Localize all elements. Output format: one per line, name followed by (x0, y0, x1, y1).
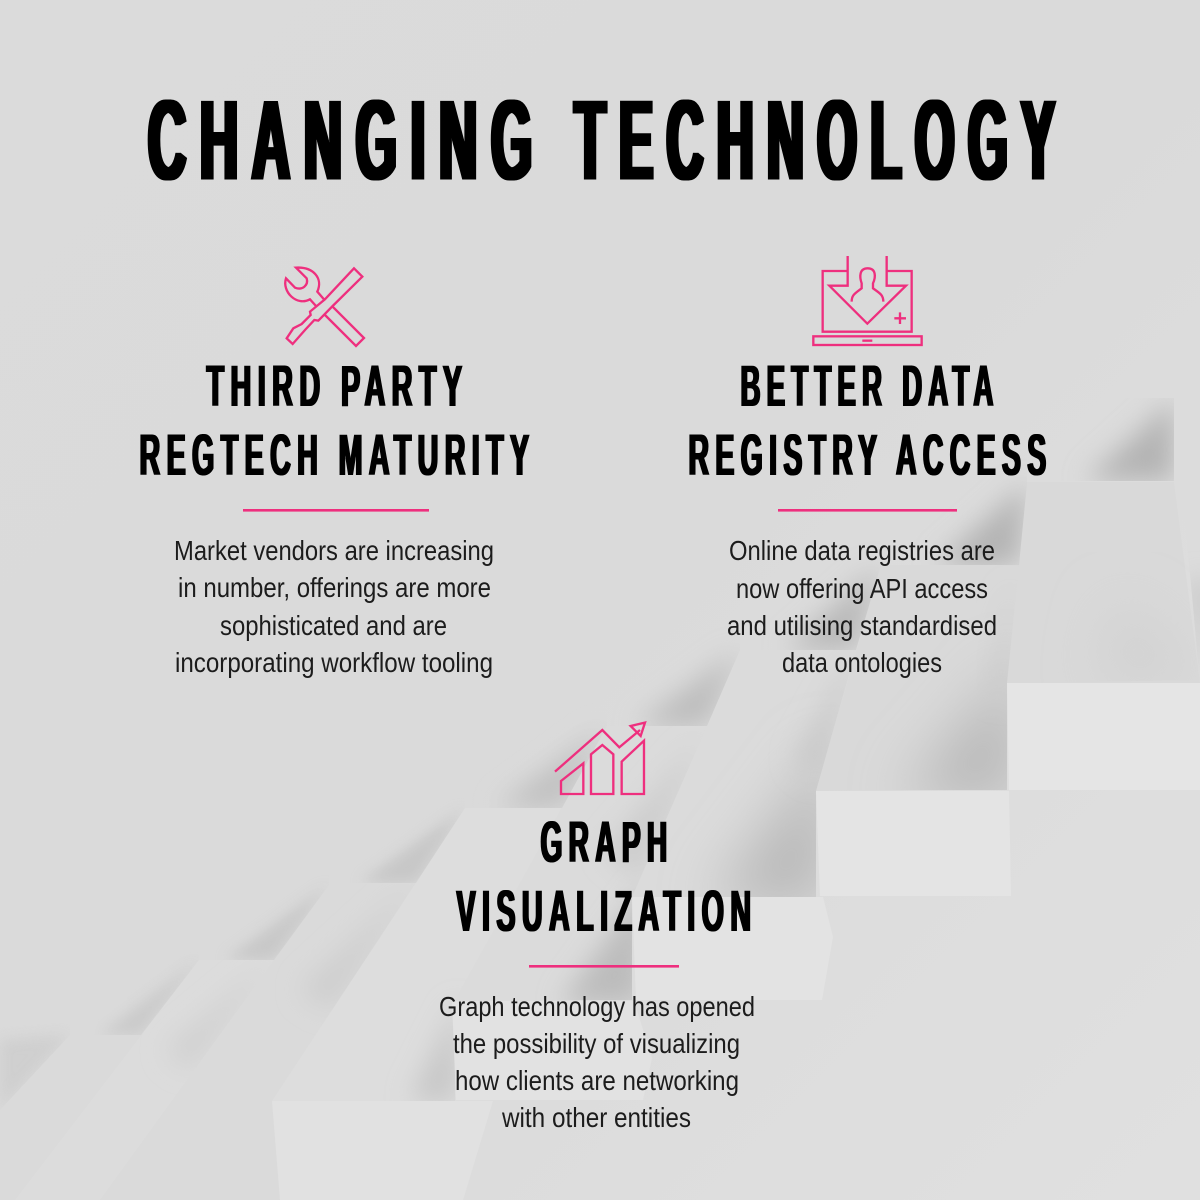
body text: how clients are networking (455, 1065, 739, 1096)
body text: data ontologies (782, 647, 942, 678)
background: white paper staircase (0, 402, 1200, 1101)
panel: third party regtech maturity (140, 268, 536, 678)
icon: wrench and screwdriver (285, 268, 364, 346)
icon: laptop with download person (813, 256, 922, 345)
body text: the possibility of visualizing (453, 1028, 740, 1059)
text: REGTECH MATURITY (140, 423, 536, 488)
divider (529, 965, 679, 968)
divider (778, 509, 957, 512)
heading (688, 354, 1052, 488)
heading: THIRD PARTY (206, 354, 468, 419)
icon: rising bar chart with arrow (555, 723, 645, 794)
panel: better data registry access (688, 256, 1052, 678)
body text: sophisticated and are (220, 610, 447, 641)
divider (243, 509, 429, 512)
body text: Online data registries are (729, 535, 995, 566)
body text (174, 535, 494, 678)
body text (727, 535, 997, 678)
body text: incorporating workflow tooling (175, 647, 493, 678)
body text: Market vendors are increasing (174, 535, 494, 566)
body text: in number, offerings are more (178, 572, 491, 603)
heading (456, 810, 758, 944)
panel: graph visualization (439, 723, 758, 1133)
body text: and utilising standardised (727, 610, 997, 641)
heading (140, 354, 536, 488)
heading: GRAPH (540, 810, 674, 875)
text: VISUALIZATION (456, 879, 758, 944)
body text: Graph technology has opened (439, 991, 755, 1022)
title: CHANGING (148, 78, 546, 204)
body text: now offering API access (736, 573, 988, 604)
body text: with other entities (501, 1102, 691, 1133)
body text (439, 991, 755, 1133)
